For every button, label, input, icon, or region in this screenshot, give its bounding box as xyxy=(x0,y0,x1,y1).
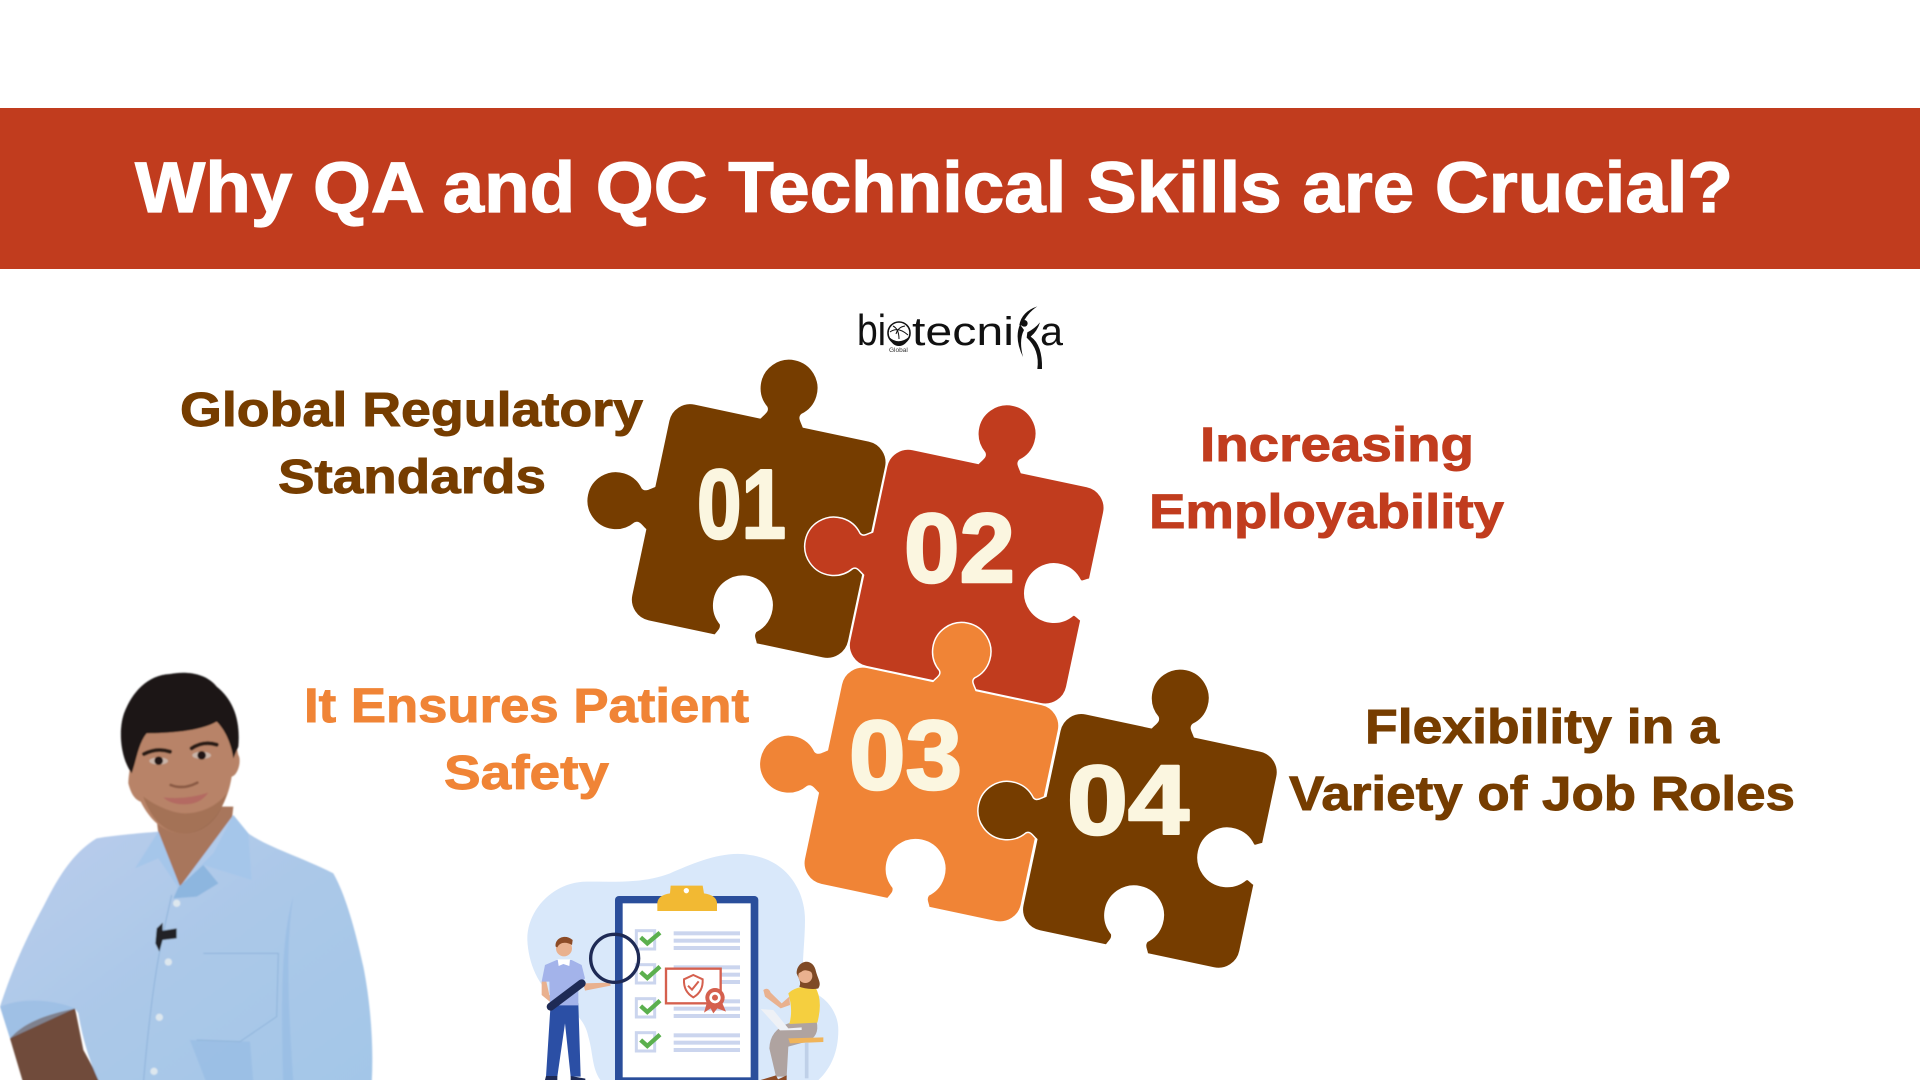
presenter portrait xyxy=(0,673,372,1080)
collar xyxy=(135,815,252,887)
woman with laptop xyxy=(761,962,823,1080)
clipboard xyxy=(615,886,758,1080)
puzzle piece 04 xyxy=(955,633,1295,973)
number 04: 04 xyxy=(1067,745,1189,855)
mouth xyxy=(163,793,208,804)
label: Global Regulatory Standards xyxy=(180,384,643,504)
label: It Ensures Patient Safety xyxy=(304,680,749,800)
checklist rows xyxy=(636,931,740,1052)
logo: biotecnika Global: Global xyxy=(889,347,908,354)
beard shadow xyxy=(143,793,227,833)
label: Flexibility in a Variety of Job Roles: Variety of Job Roles xyxy=(1289,768,1795,821)
eyes xyxy=(149,751,211,765)
puzzle diagram xyxy=(564,323,1295,973)
background blob xyxy=(527,854,838,1080)
nose xyxy=(171,783,197,787)
logo: biotecnika Global: a xyxy=(1040,310,1064,354)
label: Global Regulatory Standards: Standards xyxy=(278,451,546,504)
logo: biotecnika Global xyxy=(857,306,1064,369)
number 03: 03 xyxy=(849,700,962,810)
puzzle piece 02 xyxy=(782,369,1122,708)
logo: biotecnika Global: bi xyxy=(857,306,886,355)
label: Flexibility in a Variety of Job Roles: Flexibility in a xyxy=(1365,701,1719,754)
hair xyxy=(121,673,239,773)
magnifier xyxy=(551,934,639,1007)
puzzle piece 03 xyxy=(737,587,1076,926)
face xyxy=(128,717,240,833)
label: Increasing Employability: Increasing xyxy=(1200,419,1474,472)
logo: biotecnika Global: tecni xyxy=(912,310,1014,354)
label: It Ensures Patient Safety: It Ensures Patient xyxy=(304,680,749,733)
label: Flexibility in a Variety of Job Roles xyxy=(1289,701,1795,821)
puzzle piece 01 xyxy=(564,323,904,663)
checklist illustration xyxy=(527,854,838,1080)
clipboard clip xyxy=(657,886,717,911)
man with magnifier xyxy=(542,934,639,1080)
title band xyxy=(0,108,1920,269)
shirt shading xyxy=(0,897,293,1080)
lapel microphone xyxy=(155,923,177,952)
label: Increasing Employability xyxy=(1149,419,1504,539)
forearm xyxy=(10,1008,102,1080)
number 02: 02 xyxy=(904,493,1015,603)
eyebrows xyxy=(144,743,217,754)
certificate xyxy=(666,969,726,1013)
label: It Ensures Patient Safety: Safety xyxy=(444,747,609,800)
buttons xyxy=(150,900,180,1075)
placket and pocket xyxy=(143,895,278,1080)
shirt xyxy=(0,815,372,1080)
label: Increasing Employability: Employability xyxy=(1149,486,1504,539)
neck xyxy=(155,807,233,887)
title: Why QA and QC Technical Skills are Crucial? xyxy=(135,149,1733,228)
number 01: 01 xyxy=(697,449,786,559)
label: Global Regulatory Standards: Global Regulatory xyxy=(180,384,643,437)
